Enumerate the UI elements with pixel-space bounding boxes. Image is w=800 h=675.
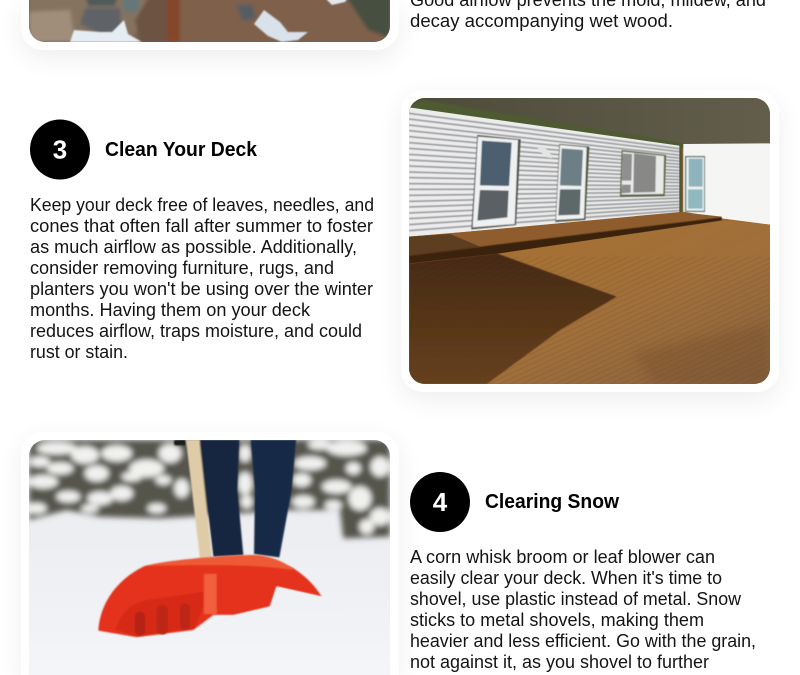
badge: number 3	[30, 120, 90, 180]
text block: clean your deck body: consider removing furniture, rugs, and	[30, 258, 334, 278]
siding	[409, 107, 682, 237]
text block: clean your deck body: months. Having them on your deck	[30, 300, 311, 320]
door frames and windows	[471, 135, 705, 229]
badge: number 3: 3	[53, 134, 67, 164]
legs	[174, 440, 296, 559]
snow heap	[29, 587, 390, 675]
heading: Clearing Snow: Clearing Snow	[485, 490, 619, 513]
text block: clearing snow body: A corn whisk broom or leaf blower can	[410, 547, 715, 567]
text block: clearing snow body: sticks to metal shovels, making them	[410, 610, 704, 630]
text block: clearing snow body: easily clear your deck. When it's time to	[410, 568, 722, 588]
panel: deck photo card	[401, 90, 779, 392]
photo: red shovel in snow	[29, 440, 390, 675]
deck	[409, 212, 722, 257]
shovel	[98, 555, 322, 637]
badge: number 4: 4	[433, 487, 448, 517]
text block: airflow continuation: decay accompanying wet wood.	[410, 11, 673, 31]
handle	[186, 440, 212, 559]
text block: airflow continuation	[410, 0, 766, 31]
heading: Clean Your Deck: Clean Your Deck	[105, 138, 258, 161]
panel: snow shovel photo card	[21, 432, 399, 675]
text block: clean your deck body: as much airflow as possible. Additionally,	[30, 237, 357, 257]
text block: clean your deck body: rust or stain.	[30, 342, 128, 362]
text block: clean your deck body: cones that often fall after summer to foster	[30, 216, 373, 236]
panel: top photo card	[21, 0, 399, 50]
text block: clearing snow body: shovel, use plastic instead of metal. Snow	[410, 589, 742, 609]
section 3: clean your deck	[30, 120, 374, 362]
text block: clean your deck body	[30, 195, 374, 362]
text block: clearing snow body: heavier and less efficient. Go with the grain,	[410, 631, 756, 651]
photo: house with wooden deck	[409, 98, 770, 384]
text block: clean your deck body: Keep your deck free of leaves, needles, and	[30, 195, 374, 215]
snowy bushes	[27, 440, 390, 538]
text block: clean your deck body: planters you won't be using over the winter	[30, 279, 373, 299]
photo: rocky ground with snow	[29, 0, 390, 42]
text block: clearing snow body	[410, 547, 756, 672]
text block: clearing snow body: not against it, as you shovel to further	[410, 652, 709, 672]
badge: number 4	[410, 472, 470, 532]
section 4: clearing snow	[410, 472, 756, 672]
text block: clean your deck body: reduces airflow, traps moisture, and could	[30, 321, 362, 341]
